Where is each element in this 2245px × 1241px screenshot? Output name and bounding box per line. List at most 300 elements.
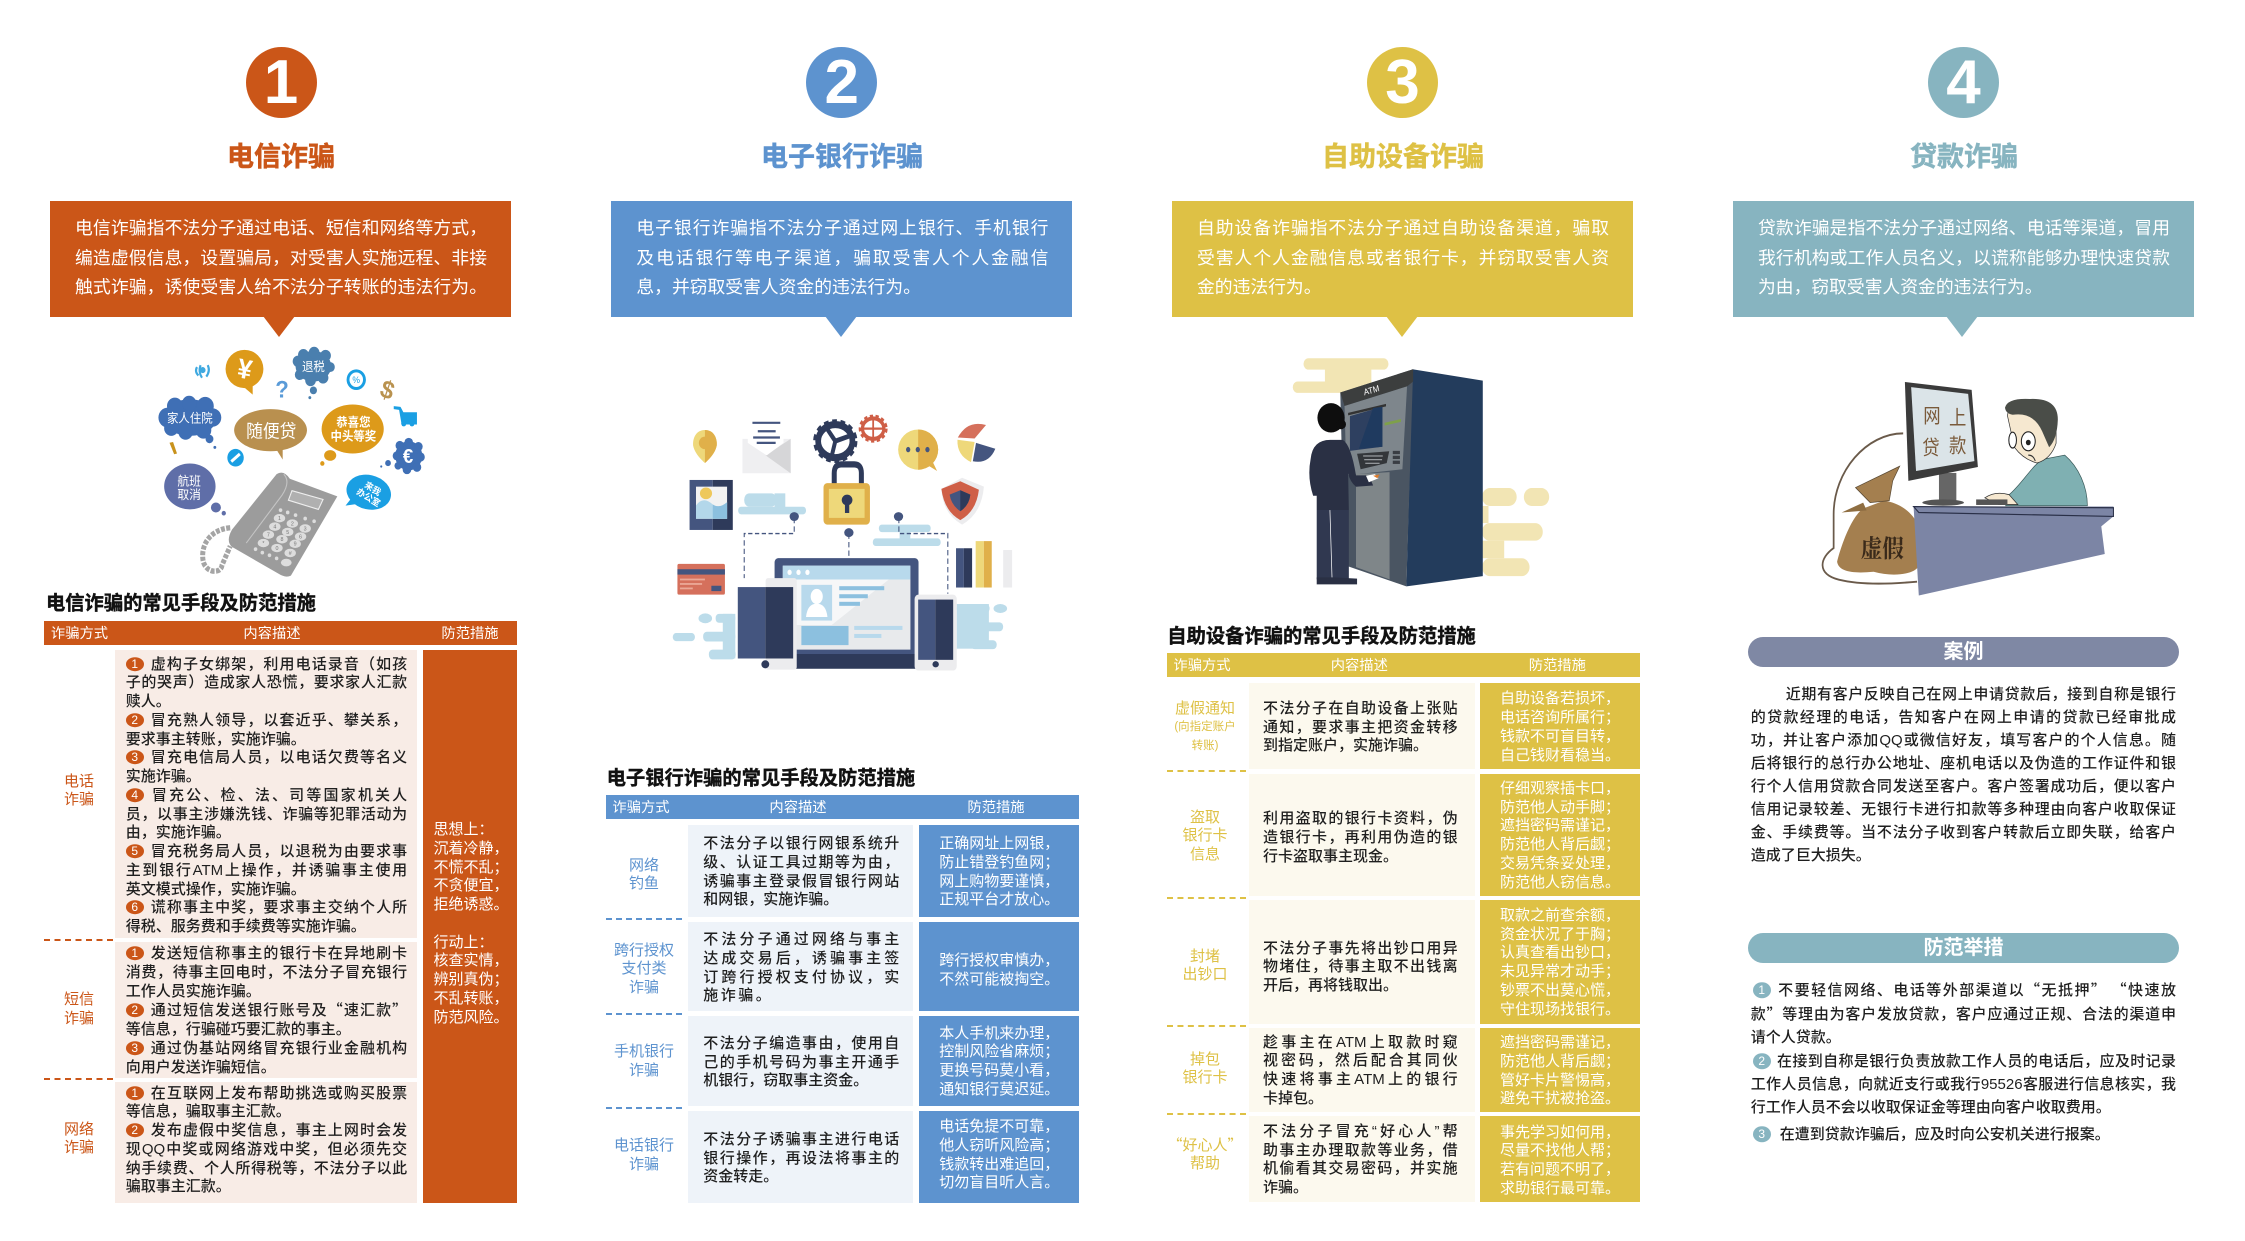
description cell: 手机银行: 不法分子编造事由，使用自: [703, 1035, 899, 1052]
description cell: 手机银行: 己的手机号码为事主开通手: [703, 1054, 899, 1071]
prevention cell: 封堵出钞口: 认真查看出钞口，: [1500, 945, 1620, 962]
prevention step 2: 工作人员信息，向就近支行或我行95526客服进行信息核实，我: [1751, 1076, 2176, 1093]
case text: 后将银行的总行办公地址、座机电话以及伪造的工作证件和银: [1751, 755, 2176, 772]
bubble: 恭喜您中头等奖: 恭喜您: [336, 415, 371, 430]
description cell: 电话诈骗: 要求事主转账，实施诈骗。: [126, 731, 306, 748]
prevention cell: 跨行授权: 不然可能被掏空。: [939, 971, 1059, 988]
prevention cell: 封堵出钞口: 取款之前查余额，: [1500, 907, 1620, 924]
case heading: [1748, 637, 2179, 667]
prevention cell: 掉包银行卡: 遮挡密码需谨记，: [1500, 1034, 1620, 1051]
prevention heading: 防范举措: [1924, 936, 2004, 958]
description cell: 掉包银行卡: 趁事主在ATM上取款时窥: [1263, 1034, 1458, 1051]
description cell: 电话诈骗: 1: [131, 657, 138, 671]
definition box: [611, 201, 1072, 316]
prevention cell: 盗取银行卡信息: 交易凭条妥处理，: [1500, 855, 1620, 872]
prevention column: 不慌不乱；: [434, 859, 509, 876]
icon: telephone: 5: [286, 530, 289, 536]
definition box: 触式诈骗，诱使受害人给不法分子转账的违法行为。: [75, 277, 487, 297]
description cell: 电话诈骗: 英文模式操作，实施诈骗。: [126, 881, 306, 898]
description cell: 电话银行: 资金转走。: [703, 1169, 778, 1186]
bubble: 来我办公室: 来我: [363, 479, 383, 498]
description cell: 网络钓鱼: 诱骗事主登录假冒银行网站: [703, 873, 899, 890]
callout pointer: [263, 316, 295, 337]
icon: chat bubble: [898, 429, 938, 471]
prevention column: 拒绝诱惑。: [434, 896, 509, 913]
bubble: euro: [380, 438, 425, 474]
description cell: 电话诈骗: 员，以事主涉嫌洗钱、诈骗等犯罪活动为: [126, 806, 407, 823]
description cell: 掉包银行卡: [1249, 1028, 1475, 1112]
description cell: 封堵出钞口: 物堵住，待事主取不出钱离: [1263, 959, 1458, 976]
description cell: 虚假通知: 到指定账户，实施诈骗。: [1263, 738, 1428, 755]
description cell: 掉包银行卡: 视密码，然后配合其同伙: [1263, 1052, 1458, 1069]
row label: 好心人帮助: 帮助: [1190, 1156, 1220, 1173]
prevention cell: 封堵出钞口: [1480, 900, 1640, 1024]
description cell: 网络诈骗: 1: [131, 1086, 138, 1100]
icon: man: [1976, 398, 2088, 505]
row label: 跨行授权支付类诈骗: 支付类: [621, 960, 666, 977]
table header: 诈骗方式: [51, 626, 108, 642]
illustration: person at ATM: [1292, 358, 1550, 586]
prevention column: 沉着冷静，: [434, 840, 509, 857]
table header: 防范措施: [1529, 658, 1586, 674]
description cell: 盗取银行卡信息: 造银行卡，再利用伪造的银: [1263, 829, 1458, 846]
bubble: 随便贷: [234, 409, 307, 460]
prevention cell: 盗取银行卡信息: 防范他人背后觑；: [1500, 836, 1620, 853]
panel: 电子银行诈骗: [606, 47, 1079, 1203]
prevention step 1: [1751, 979, 2176, 1046]
definition box: 电信诈骗指不法分子通过电话、短信和网络等方式，: [75, 218, 487, 238]
prevention cell: 掉包银行卡: [1480, 1028, 1640, 1112]
icon: red gear: [860, 416, 886, 441]
prevention cell: 好心人帮助: 尽量不找他人帮；: [1500, 1142, 1620, 1159]
description cell: 电话诈骗: 5: [131, 844, 138, 858]
description cell: 短信诈骗: 2: [131, 1004, 138, 1018]
bubble: 家人住院: [159, 396, 221, 449]
row label: 掉包银行卡: 银行卡: [1182, 1070, 1228, 1087]
prevention cell: 网络钓鱼: 防止错登钓鱼网；: [939, 854, 1059, 871]
panel: 贷款诈骗: [1733, 47, 2194, 1143]
icon: telephone: 6: [299, 535, 302, 541]
description cell: 虚假通知: 通知，要求事主把资金转移: [1263, 719, 1458, 736]
row label: 封堵出钞口: [1182, 948, 1228, 983]
desk: [1914, 506, 2114, 595]
row label: 虚假通知: (向指定账户: [1174, 721, 1236, 733]
prevention cell: 电话银行: 切勿盲目听人言。: [939, 1175, 1059, 1192]
description cell: 网络诈骗: 发布虚假中奖信息，事主上网时会发: [150, 1122, 407, 1139]
prevention cell: 盗取银行卡信息: 仔细观察插卡口，: [1500, 780, 1620, 797]
description cell: 好心人帮助: 诈骗。: [1263, 1179, 1308, 1196]
bubble: 航班取消: [164, 464, 226, 516]
description cell: 电话诈骗: 冒充公、检、法、司等国家机关人: [150, 787, 407, 804]
row label: 盗取银行卡信息: 银行卡: [1182, 827, 1228, 844]
prevention cell: 电话银行: 电话免提不可靠，: [939, 1119, 1059, 1136]
description cell: 跨行授权: 订跨行授权支付协议，实: [703, 969, 899, 986]
description cell: 电话诈骗: 2: [131, 713, 138, 727]
heading: 贷款诈骗: 贷款诈骗: [1910, 142, 2018, 172]
description cell: 虚假通知: 不法分子在自助设备上张贴: [1263, 700, 1458, 717]
icon: no sign: [227, 449, 244, 467]
number badge 2: [806, 47, 877, 118]
prevention cell: 虚假通知: 自助设备若损坏，: [1500, 691, 1620, 708]
case text: 行个人信用贷款合同发送至客户。客户签署成功后，便以客户: [1751, 778, 2176, 795]
description cell: 掉包银行卡: 卡掉包。: [1263, 1090, 1323, 1107]
description cell: 短信诈骗: 消费，待事主回电时，不法分子冒充银行: [126, 964, 407, 981]
description cell: 电话诈骗: 6: [131, 901, 138, 915]
icon: dollar: $: [377, 375, 398, 407]
bubble: 退税: 退税: [302, 360, 325, 375]
panel: 电信诈骗: [44, 47, 517, 1203]
prevention cell: 手机银行: 本人手机来办理，: [939, 1025, 1059, 1042]
prevention step 1: 不要轻信网络、电话等外部渠道以“无抵押” “快速放: [1777, 979, 2176, 1000]
heading: 自助设备诈骗: 自助设备诈骗: [1322, 142, 1484, 172]
prevention cell: 虚假通知: [1480, 683, 1640, 769]
description cell: 电话诈骗: 赎人。: [126, 693, 171, 710]
icon: telephone: *: [262, 541, 265, 547]
description cell: 好心人帮助: 不法分子冒充“好心人”帮: [1263, 1123, 1458, 1140]
icon: monitor: 贷: [1922, 436, 1940, 458]
prevention step 1: 1: [1758, 983, 1765, 997]
prevention cell: 手机银行: 更换号码莫小看，: [939, 1062, 1059, 1079]
icon: telephone: [203, 473, 337, 577]
description cell: 电话诈骗: 3: [131, 751, 138, 765]
description cell: 短信诈骗: [115, 942, 417, 1078]
row label: 电话银行诈骗: [614, 1137, 674, 1173]
row label: 盗取银行卡信息: [1182, 809, 1228, 863]
definition box: 金的违法行为。: [1197, 277, 1321, 297]
icon: ATM machine: [1340, 369, 1482, 586]
row label: 电话诈骗: 诈骗: [64, 791, 94, 808]
table header: 内容描述: [769, 800, 827, 816]
table title: 电子银行诈骗的常见手段及防范措施: [607, 768, 915, 789]
callout pointer: [1386, 316, 1418, 337]
bubble: 随便贷: 随便贷: [246, 421, 297, 442]
icon: tablet: [737, 578, 796, 670]
definition box: 受害人个人金融信息或者银行卡，并窃取受害人资: [1197, 248, 1609, 268]
row label: 封堵出钞口: 出钞口: [1182, 966, 1228, 983]
prevention column: 思想上：: [434, 821, 494, 838]
definition box: 息，并窃取受害人资金的违法行为。: [636, 277, 921, 297]
prevention column: 不乱转账，: [434, 990, 509, 1007]
description cell: 封堵出钞口: 开后，再将钱取出。: [1263, 977, 1398, 994]
row label: 电话银行诈骗: 诈骗: [629, 1156, 659, 1173]
prevention cell: 掉包银行卡: 管好卡片警惕高，: [1500, 1072, 1620, 1089]
prevention step 2: 在接到自称是银行负责放款工作人员的电话后，应及时记录: [1777, 1053, 2176, 1070]
prevention column: [422, 650, 517, 1203]
prevention column: 行动上：: [434, 934, 494, 951]
prevention cell: 网络钓鱼: 网上购物要谨慎，: [939, 873, 1059, 890]
description cell: 网络诈骗: 在互联网上发布帮助挑选或购买股票: [150, 1085, 407, 1102]
prevention cell: 封堵出钞口: 守住现场找银行。: [1500, 1001, 1620, 1018]
prevention cell: 好心人帮助: 事先学习如何用，: [1500, 1124, 1620, 1141]
illustration: telephone with speech bubbles: [158, 346, 425, 577]
table header: [44, 620, 517, 644]
icon: shopping cart: [394, 406, 417, 427]
prevention cell: 网络钓鱼: [919, 825, 1079, 917]
description cell: 网络钓鱼: [688, 825, 913, 917]
description cell: 网络诈骗: 骗取事主汇款。: [126, 1179, 231, 1196]
icon: yen bubble: [226, 350, 264, 395]
icon: location pin: [693, 430, 716, 463]
number badge 2: 2: [825, 48, 859, 117]
row label: 跨行授权支付类诈骗: 跨行授权: [614, 942, 674, 959]
description cell: 封堵出钞口: [1249, 900, 1475, 1024]
prevention cell: 盗取银行卡信息: [1480, 774, 1640, 896]
row label: 网络诈骗: 诈骗: [64, 1139, 94, 1156]
description cell: 网络钓鱼: 不法分子以银行网银系统升: [703, 836, 899, 853]
prevention column: 辨别真伪；: [434, 971, 509, 988]
icon: dark gear: [815, 421, 855, 461]
description cell: 网络钓鱼: 和网银，实施诈骗。: [703, 892, 838, 909]
case text: [1751, 686, 2176, 864]
number badge 1: [246, 47, 316, 118]
definition box: [1733, 201, 2194, 316]
prevention cell: 跨行授权: [919, 922, 1079, 1011]
prevention cell: 封堵出钞口: 资金状况了于胸；: [1500, 926, 1620, 943]
description cell: 短信诈骗: 工作人员实施诈骗。: [126, 983, 261, 1000]
table header: 防范措施: [967, 800, 1025, 816]
prevention cell: 虚假通知: 电话咨询所属行；: [1500, 709, 1620, 726]
row label: 短信诈骗: 诈骗: [64, 1010, 94, 1027]
description cell: 网络诈骗: 纳手续费、个人所得税等，不法分子以此: [126, 1160, 407, 1177]
icon: monitor: 款: [1949, 434, 1967, 456]
description cell: 短信诈骗: 向用户发送诈骗短信。: [126, 1059, 276, 1076]
table header: [1167, 653, 1640, 677]
description cell: 电话诈骗: 谎称事主中奖，要求事主交纳个人所: [150, 900, 407, 917]
callout pointer: [1946, 316, 1978, 337]
prevention cell: 好心人帮助: [1480, 1116, 1640, 1202]
description cell: 电话诈骗: 由，实施诈骗。: [126, 825, 231, 842]
table header: 防范措施: [441, 626, 499, 642]
cord: [1823, 433, 1917, 583]
description cell: 跨行授权: 施诈骗。: [703, 988, 773, 1005]
prevention cell: 盗取银行卡信息: 防范他人动手脚；: [1500, 799, 1620, 816]
prevention cell: 电话银行: 他人窃听风险高；: [939, 1137, 1059, 1154]
row label: 短信诈骗: 短信: [64, 991, 94, 1008]
number badge 1: 1: [264, 48, 298, 117]
definition box: 及电话银行等电子渠道，骗取受害人个人金融信: [636, 248, 1048, 268]
panel: 自助设备诈骗: [1167, 47, 1640, 1202]
description cell: 电话诈骗: 虚构子女绑架，利用电话录音（如孩: [150, 656, 407, 673]
prevention column: 不贪便宜，: [434, 877, 509, 894]
bubble: 航班取消: 取消: [177, 488, 201, 502]
description cell: 网络钓鱼: 级、认证工具过期等为由，: [703, 854, 899, 871]
decorative clouds: [1292, 358, 1549, 576]
bubble: 恭喜您中头等奖: [320, 405, 384, 466]
description cell: 电话诈骗: 主到银行ATM上操作，并诱骗事主使用: [126, 862, 407, 879]
case text: 的贷款经理的电话，告知客户在网上申请的贷款已经审批成: [1751, 709, 2176, 726]
prevention cell: 手机银行: [919, 1016, 1079, 1106]
icon: telephone: 8: [281, 537, 284, 544]
icon: telephone: 2: [291, 522, 294, 528]
description cell: 好心人帮助: [1249, 1116, 1475, 1202]
icon: picture frame: [689, 480, 732, 530]
number badge 3: 3: [1385, 48, 1420, 117]
icon: telephone: 9: [294, 542, 297, 548]
icon: padlock: [823, 464, 870, 524]
row label: 网络诈骗: [64, 1121, 94, 1156]
row label: 电话诈骗: [64, 773, 94, 808]
definition box: [1172, 201, 1633, 316]
prevention cell: 电话银行: [919, 1111, 1079, 1203]
icon: monitor: [1905, 382, 1978, 505]
description cell: 短信诈骗: 等信息，行骗碰巧要汇款的事主。: [126, 1021, 351, 1038]
case text: 信用记录较差、无银行卡进行扣款等多种理由向客户收取保证: [1751, 801, 2176, 818]
table header: 内容描述: [243, 626, 301, 642]
row label: 虚假通知: [1174, 700, 1236, 752]
row label: 跨行授权支付类诈骗: [614, 942, 674, 996]
description cell: 电话诈骗: 4: [131, 788, 138, 802]
icon: person: [1309, 403, 1379, 584]
description cell: 跨行授权: 不法分子通过网络与事主: [703, 932, 899, 949]
prevention cell: 网络钓鱼: 正确网址上网银，: [939, 836, 1059, 853]
description cell: 盗取银行卡信息: [1249, 774, 1475, 896]
row label: 手机银行诈骗: 诈骗: [629, 1062, 659, 1079]
decorative clouds: [738, 493, 940, 546]
prevention cell: 虚假通知: 自己钱财看稳当。: [1500, 747, 1620, 764]
prevention cell: 盗取银行卡信息: 遮挡密码需谨记，: [1500, 818, 1620, 835]
icon: percent: %: [353, 375, 360, 385]
row label: 手机银行诈骗: [614, 1043, 674, 1079]
description cell: 电话诈骗: 得税、服务费和手续费等实施诈骗。: [126, 918, 366, 935]
case text: 金、手续费等。当不法分子收到客户转款后立即失联，给客户: [1751, 824, 2176, 841]
definition box: 电子银行诈骗指不法分子通过网上银行、手机银行: [636, 218, 1048, 238]
connector lines: [744, 518, 948, 594]
description cell: 掉包银行卡: 快速将事主ATM上的银行: [1263, 1071, 1458, 1088]
row label: 盗取银行卡信息: 信息: [1190, 846, 1220, 863]
icon: phone: [914, 595, 956, 670]
row label: 好心人帮助: [1167, 1134, 1243, 1173]
description cell: 短信诈骗: 1: [131, 946, 138, 960]
description cell: 手机银行: 机银行，窃取事主资金。: [703, 1073, 868, 1090]
definition box: [50, 201, 511, 316]
prevention step 1: 请个人贷款。: [1751, 1029, 1841, 1046]
prevention cell: 手机银行: 通知银行莫迟延。: [939, 1081, 1059, 1098]
heading: 电子银行诈骗: 电子银行诈骗: [761, 142, 923, 172]
row label: 掉包银行卡: [1182, 1051, 1228, 1087]
row label: 封堵出钞口: 封堵: [1190, 948, 1220, 965]
connector nodes: [789, 512, 903, 537]
icon: envelope: [742, 422, 790, 473]
bubble: 来我办公室: 办公室: [355, 486, 383, 509]
icon: telephone: 7: [267, 533, 270, 539]
prevention cell: 掉包银行卡: 防范他人背后觑；: [1500, 1053, 1620, 1070]
row label: 电话银行诈骗: 电话银行: [614, 1138, 674, 1155]
description cell: 短信诈骗: 通过伪基站网络冒充银行业金融机构: [150, 1040, 407, 1057]
heading: 电信诈骗: 电信诈骗: [227, 142, 335, 172]
prevention cell: 跨行授权: 跨行授权审慎办，: [939, 952, 1059, 969]
icon: percent: [347, 370, 366, 390]
description cell: 网络诈骗: [115, 1082, 417, 1203]
description cell: 电话诈骗: [115, 650, 417, 938]
prevention cell: 虚假通知: 钱款不可盲目转，: [1500, 728, 1620, 745]
row label: 盗取银行卡信息: 盗取: [1190, 809, 1220, 826]
icon: laptop: [774, 558, 918, 669]
definition box: 自助设备诈骗指不法分子通过自助设备渠道，骗取: [1197, 218, 1609, 238]
description cell: 盗取银行卡信息: 行卡盗取事主现金。: [1263, 848, 1398, 865]
row label: 跨行授权支付类诈骗: 诈骗: [629, 979, 659, 996]
row label: 掉包银行卡: 掉包: [1190, 1051, 1220, 1068]
icon: telephone: 4: [273, 525, 276, 531]
illustration: online banking devices: [672, 414, 1012, 670]
row label: 虚假通知: 转账): [1192, 740, 1218, 752]
icon: telephone: 1: [278, 516, 281, 522]
description cell: 好心人帮助: 机偷看其交易密码，并实施: [1263, 1161, 1458, 1178]
number badge 3: [1367, 47, 1438, 118]
row label: 网络诈骗: 网络: [64, 1121, 94, 1138]
description cell: 跨行授权: 达成交易后，诱骗事主签: [703, 950, 899, 967]
prevention heading: [1748, 932, 2179, 962]
case heading: 案例: [1944, 641, 1984, 663]
prevention step 3: 3: [1758, 1127, 1765, 1141]
description cell: 短信诈骗: 3: [131, 1041, 138, 1055]
case text: 近期有客户反映自己在网上申请贷款后，接到自称是银行: [1786, 686, 2176, 703]
definition box: 我行机构或工作人员名义，以谎称能够办理快速贷款: [1758, 248, 2170, 268]
icon: telephone: 3: [304, 527, 307, 533]
illustration: man at computer with fake loan bag: [1822, 382, 2114, 596]
icon: wifi: [196, 365, 209, 378]
prevention step 2: 行工作人员不会以收取保证金等理由向客户收取费用。: [1751, 1099, 2111, 1116]
description cell: 短信诈骗: 通过短信发送银行账号及“速汇款”: [150, 1000, 407, 1021]
prevention step 2: 2: [1758, 1054, 1765, 1068]
case text: 功，并让客户添加QQ或微信好友，填写客户的个人信息。随: [1751, 732, 2176, 749]
row label: 手机银行诈骗: 手机银行: [614, 1043, 674, 1060]
icon: fake money bag: [1837, 466, 1919, 574]
number badge 4: 4: [1946, 48, 1981, 117]
description cell: 电话银行: 不法分子诱骗事主进行电话: [703, 1131, 899, 1148]
case text: 造成了巨大损失。: [1751, 847, 1871, 864]
description cell: 手机银行: [688, 1016, 913, 1106]
prevention cell: 网络钓鱼: 正规平台才放心。: [939, 892, 1059, 909]
bubble: 航班取消: 航班: [177, 473, 201, 489]
bubble: 退税: [293, 347, 335, 399]
prevention column: 防范风险。: [434, 1009, 509, 1026]
row label: 网络钓鱼: 网络: [629, 857, 659, 874]
description cell: 盗取银行卡信息: 利用盗取的银行卡资料，伪: [1263, 811, 1458, 828]
description cell: 跨行授权: [688, 922, 913, 1011]
description cell: 电话诈骗: 冒充电信局人员，以电话欠费等名义: [150, 750, 407, 767]
row label: 网络钓鱼: [629, 857, 659, 892]
prevention cell: 盗取银行卡信息: 防范他人窃信息。: [1500, 874, 1620, 891]
description cell: 电话诈骗: 冒充熟人领导，以套近乎、攀关系，: [150, 712, 407, 729]
definition box: 贷款诈骗是指不法分子通过网络、电话等渠道，冒用: [1758, 218, 2170, 238]
icon: question mark: ?: [275, 376, 289, 403]
icon: fake money bag: 虚假: [1861, 534, 1904, 562]
row label: 短信诈骗: [64, 991, 94, 1027]
icon: ATM machine: ATM: [1362, 383, 1380, 398]
description cell: 好心人帮助: 助事主办理取款等业务，借: [1263, 1142, 1458, 1159]
description cell: 网络诈骗: 等信息，骗取事主汇款。: [126, 1104, 291, 1121]
description cell: 虚假通知: [1249, 683, 1475, 769]
icon: telephone: 0: [276, 546, 279, 552]
prevention step 1: 款”等理由为客户发放贷款，客户应通过正规、合法的渠道申: [1751, 1003, 2176, 1024]
icon: exclamation: [170, 442, 177, 455]
description cell: 电话诈骗: 实施诈骗。: [126, 768, 201, 785]
prevention cell: 封堵出钞口: 钞票不出莫心慌，: [1500, 982, 1620, 999]
description cell: 电话诈骗: 子的哭声）造成家人恐慌，要求家人汇款: [126, 674, 407, 691]
description cell: 封堵出钞口: 不法分子事先将出钞口用异: [1263, 940, 1458, 957]
table header: [606, 795, 1079, 819]
callout pointer: [825, 316, 857, 337]
prevention step 3: 在遭到贷款诈骗后，应及时向公安机关进行报案。: [1780, 1126, 2110, 1143]
icon: bank card: [677, 564, 725, 595]
description cell: 网络诈骗: 现QQ中奖或网络游戏中奖，但必须先交: [126, 1141, 407, 1158]
row label: 电话诈骗: 电话: [64, 773, 94, 790]
row label: 虚假通知: 虚假通知: [1175, 700, 1235, 717]
bubble: 家人住院: 家人住院: [167, 411, 213, 426]
row label: 网络钓鱼: 钓鱼: [629, 875, 659, 892]
bubble: 恭喜您中头等奖: 中头等奖: [331, 429, 377, 444]
icon: monitor: 上: [1949, 406, 1967, 428]
